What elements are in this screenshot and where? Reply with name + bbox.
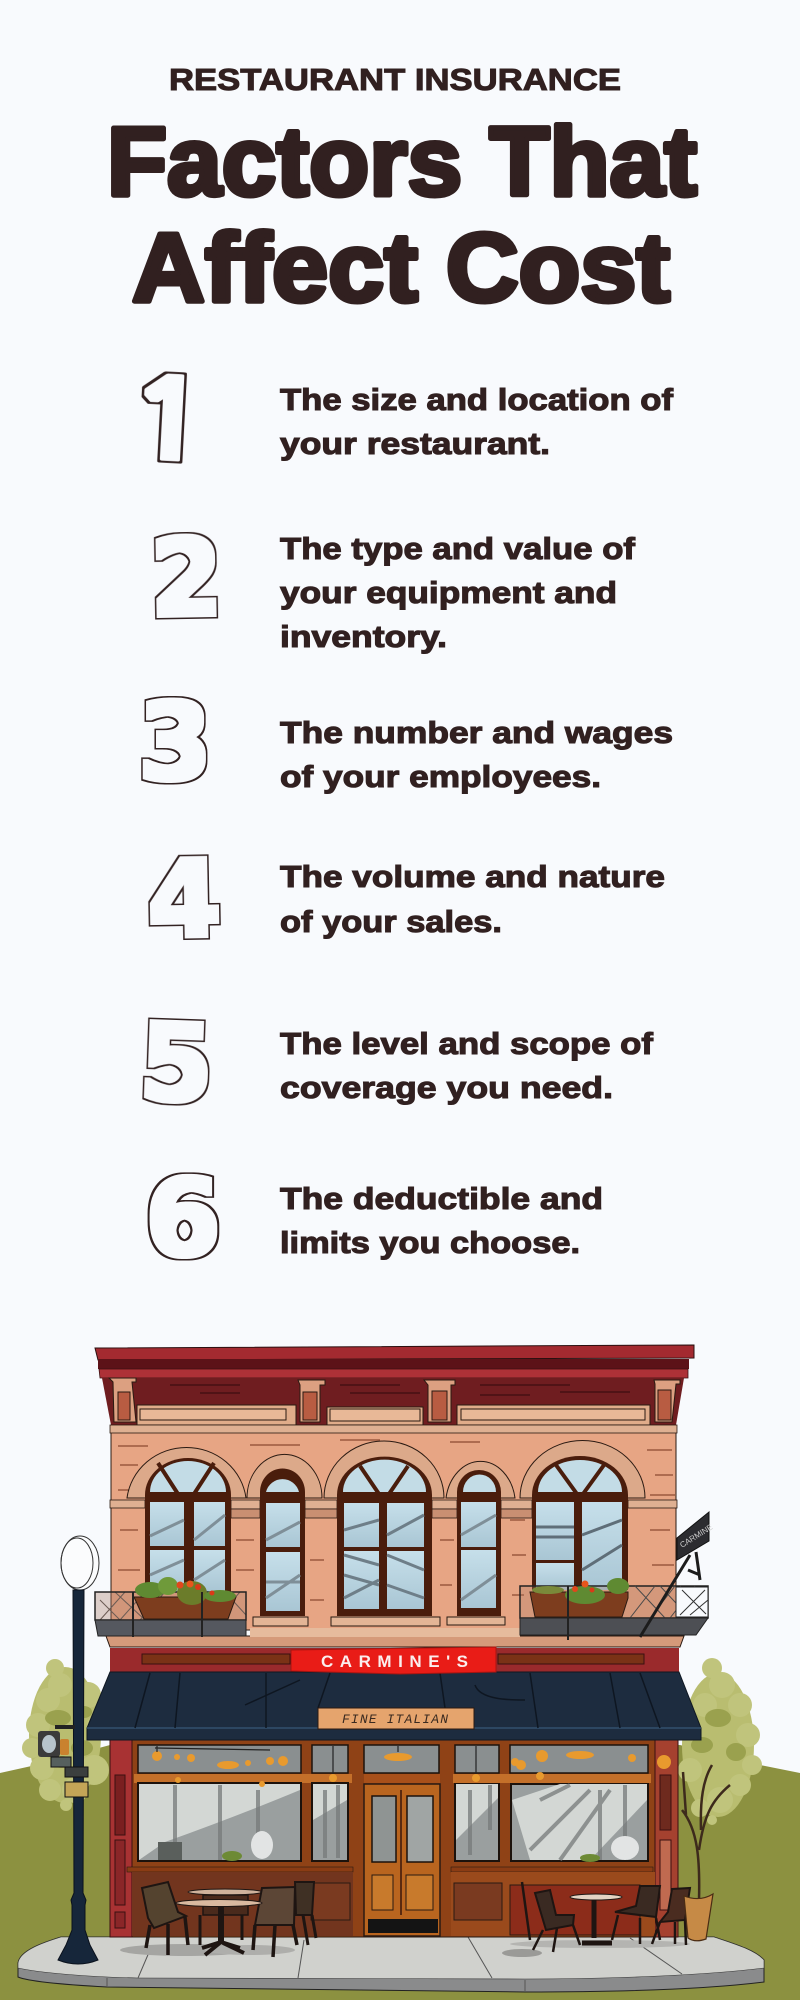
factor 1 text <box>280 382 674 461</box>
glass panes <box>138 1783 648 1861</box>
right planter <box>530 1592 628 1617</box>
number 5: 5 <box>137 1001 215 1126</box>
factor 3 text: of your employees. <box>280 759 601 794</box>
number 3: 3 <box>138 681 212 804</box>
window 1 <box>145 1458 231 1592</box>
number 1: 1 <box>126 366 212 477</box>
chair left <box>142 1882 188 1955</box>
factor 1 text: your restaurant. <box>280 426 550 461</box>
lamp globe <box>61 1536 99 1590</box>
factor 2 text: inventory. <box>280 619 447 654</box>
brackets <box>109 1378 680 1422</box>
factor 4 <box>146 837 665 962</box>
right tree <box>678 1658 762 1900</box>
left and right red pillars <box>110 1740 678 1937</box>
cornice ledge <box>110 1425 677 1433</box>
brick lines <box>118 1440 675 1600</box>
factor 3 <box>138 681 673 804</box>
window display plants <box>158 1831 639 1862</box>
right balcony <box>520 1552 708 1640</box>
factor 1 text: The size and location of <box>280 382 674 417</box>
street signs <box>51 1757 88 1797</box>
left flowers <box>135 1577 236 1605</box>
sills and lower panels <box>127 1867 655 1936</box>
window 3 <box>337 1457 432 1616</box>
top cornice <box>95 1345 694 1378</box>
front table <box>176 1900 262 1955</box>
chair back right <box>295 1882 316 1945</box>
sign: fine italian: FINE ITALIAN <box>342 1712 448 1727</box>
factor 1 <box>126 366 674 477</box>
factor 6 text: The deductible and <box>280 1181 603 1216</box>
number 4: 4 <box>146 837 222 962</box>
number 2: 2 <box>149 516 224 641</box>
street lamp <box>38 1536 99 1964</box>
title: Factors That <box>107 107 697 216</box>
factor 5 text: coverage you need. <box>280 1070 613 1105</box>
sign: carmine's: CARMINE'S <box>321 1652 468 1671</box>
sign: fine italian <box>318 1708 474 1729</box>
chair right <box>253 1887 297 1957</box>
factor 4 text <box>280 859 665 939</box>
left balcony <box>95 1577 246 1637</box>
sign: carmine's <box>291 1647 496 1674</box>
factor 4 text: The volume and nature <box>280 859 665 894</box>
factor 2 text <box>280 531 636 654</box>
entablature panels <box>137 1405 650 1425</box>
building <box>87 1345 714 1937</box>
fire escape stair <box>640 1555 690 1637</box>
chairs <box>522 1882 580 1952</box>
right flowers <box>532 1578 629 1604</box>
factor 6 <box>145 1158 603 1281</box>
glass reflections <box>139 1784 647 1860</box>
factor 6 text: limits you choose. <box>280 1225 580 1260</box>
green ground hill <box>0 1745 800 2000</box>
left table and chairs <box>142 1882 316 1957</box>
arch surrounds <box>127 1441 645 1498</box>
factor 3 text: The number and wages <box>280 715 673 750</box>
subtitle: RESTAURANT INSURANCE <box>169 62 621 97</box>
factor 6 text <box>280 1181 603 1260</box>
back table <box>188 1889 262 1945</box>
factor 3 text <box>280 715 673 794</box>
hanging side sign: CARMINE <box>678 1523 714 1550</box>
storefront base <box>110 1738 678 1937</box>
awning <box>87 1672 701 1740</box>
frieze <box>102 1378 684 1425</box>
window 2 <box>260 1468 305 1616</box>
title: Affect Cost <box>132 213 670 322</box>
factor 5 text <box>280 1026 654 1105</box>
factor 5 <box>137 1001 654 1126</box>
lamp pole <box>58 1590 98 1964</box>
red fascia band <box>110 1648 679 1673</box>
plant pot <box>684 1894 713 1941</box>
factor 5 text: The level and scope of <box>280 1026 654 1061</box>
factor 2 <box>149 516 636 654</box>
impost bands <box>110 1500 677 1518</box>
door <box>364 1784 440 1936</box>
window 5 <box>532 1456 628 1590</box>
sidewalk <box>18 1937 764 1992</box>
left planter <box>134 1597 236 1619</box>
number 6: 6 <box>145 1158 221 1281</box>
title <box>107 107 697 322</box>
upper wall <box>111 1430 676 1630</box>
factor 2 text: your equipment and <box>280 575 617 610</box>
factor 2 text: The type and value of <box>280 531 636 566</box>
table <box>570 1894 622 1943</box>
factor 4 text: of your sales. <box>280 904 502 939</box>
storefront windows <box>134 1745 671 1862</box>
lower ledge <box>106 1636 684 1647</box>
window 4 <box>457 1470 501 1616</box>
left tree <box>22 1659 109 1811</box>
hanging side sign <box>677 1512 714 1560</box>
hanging lights <box>152 1750 671 1787</box>
window sills <box>253 1617 505 1626</box>
right table and chairs <box>522 1882 690 1952</box>
traffic signal <box>38 1727 75 1757</box>
